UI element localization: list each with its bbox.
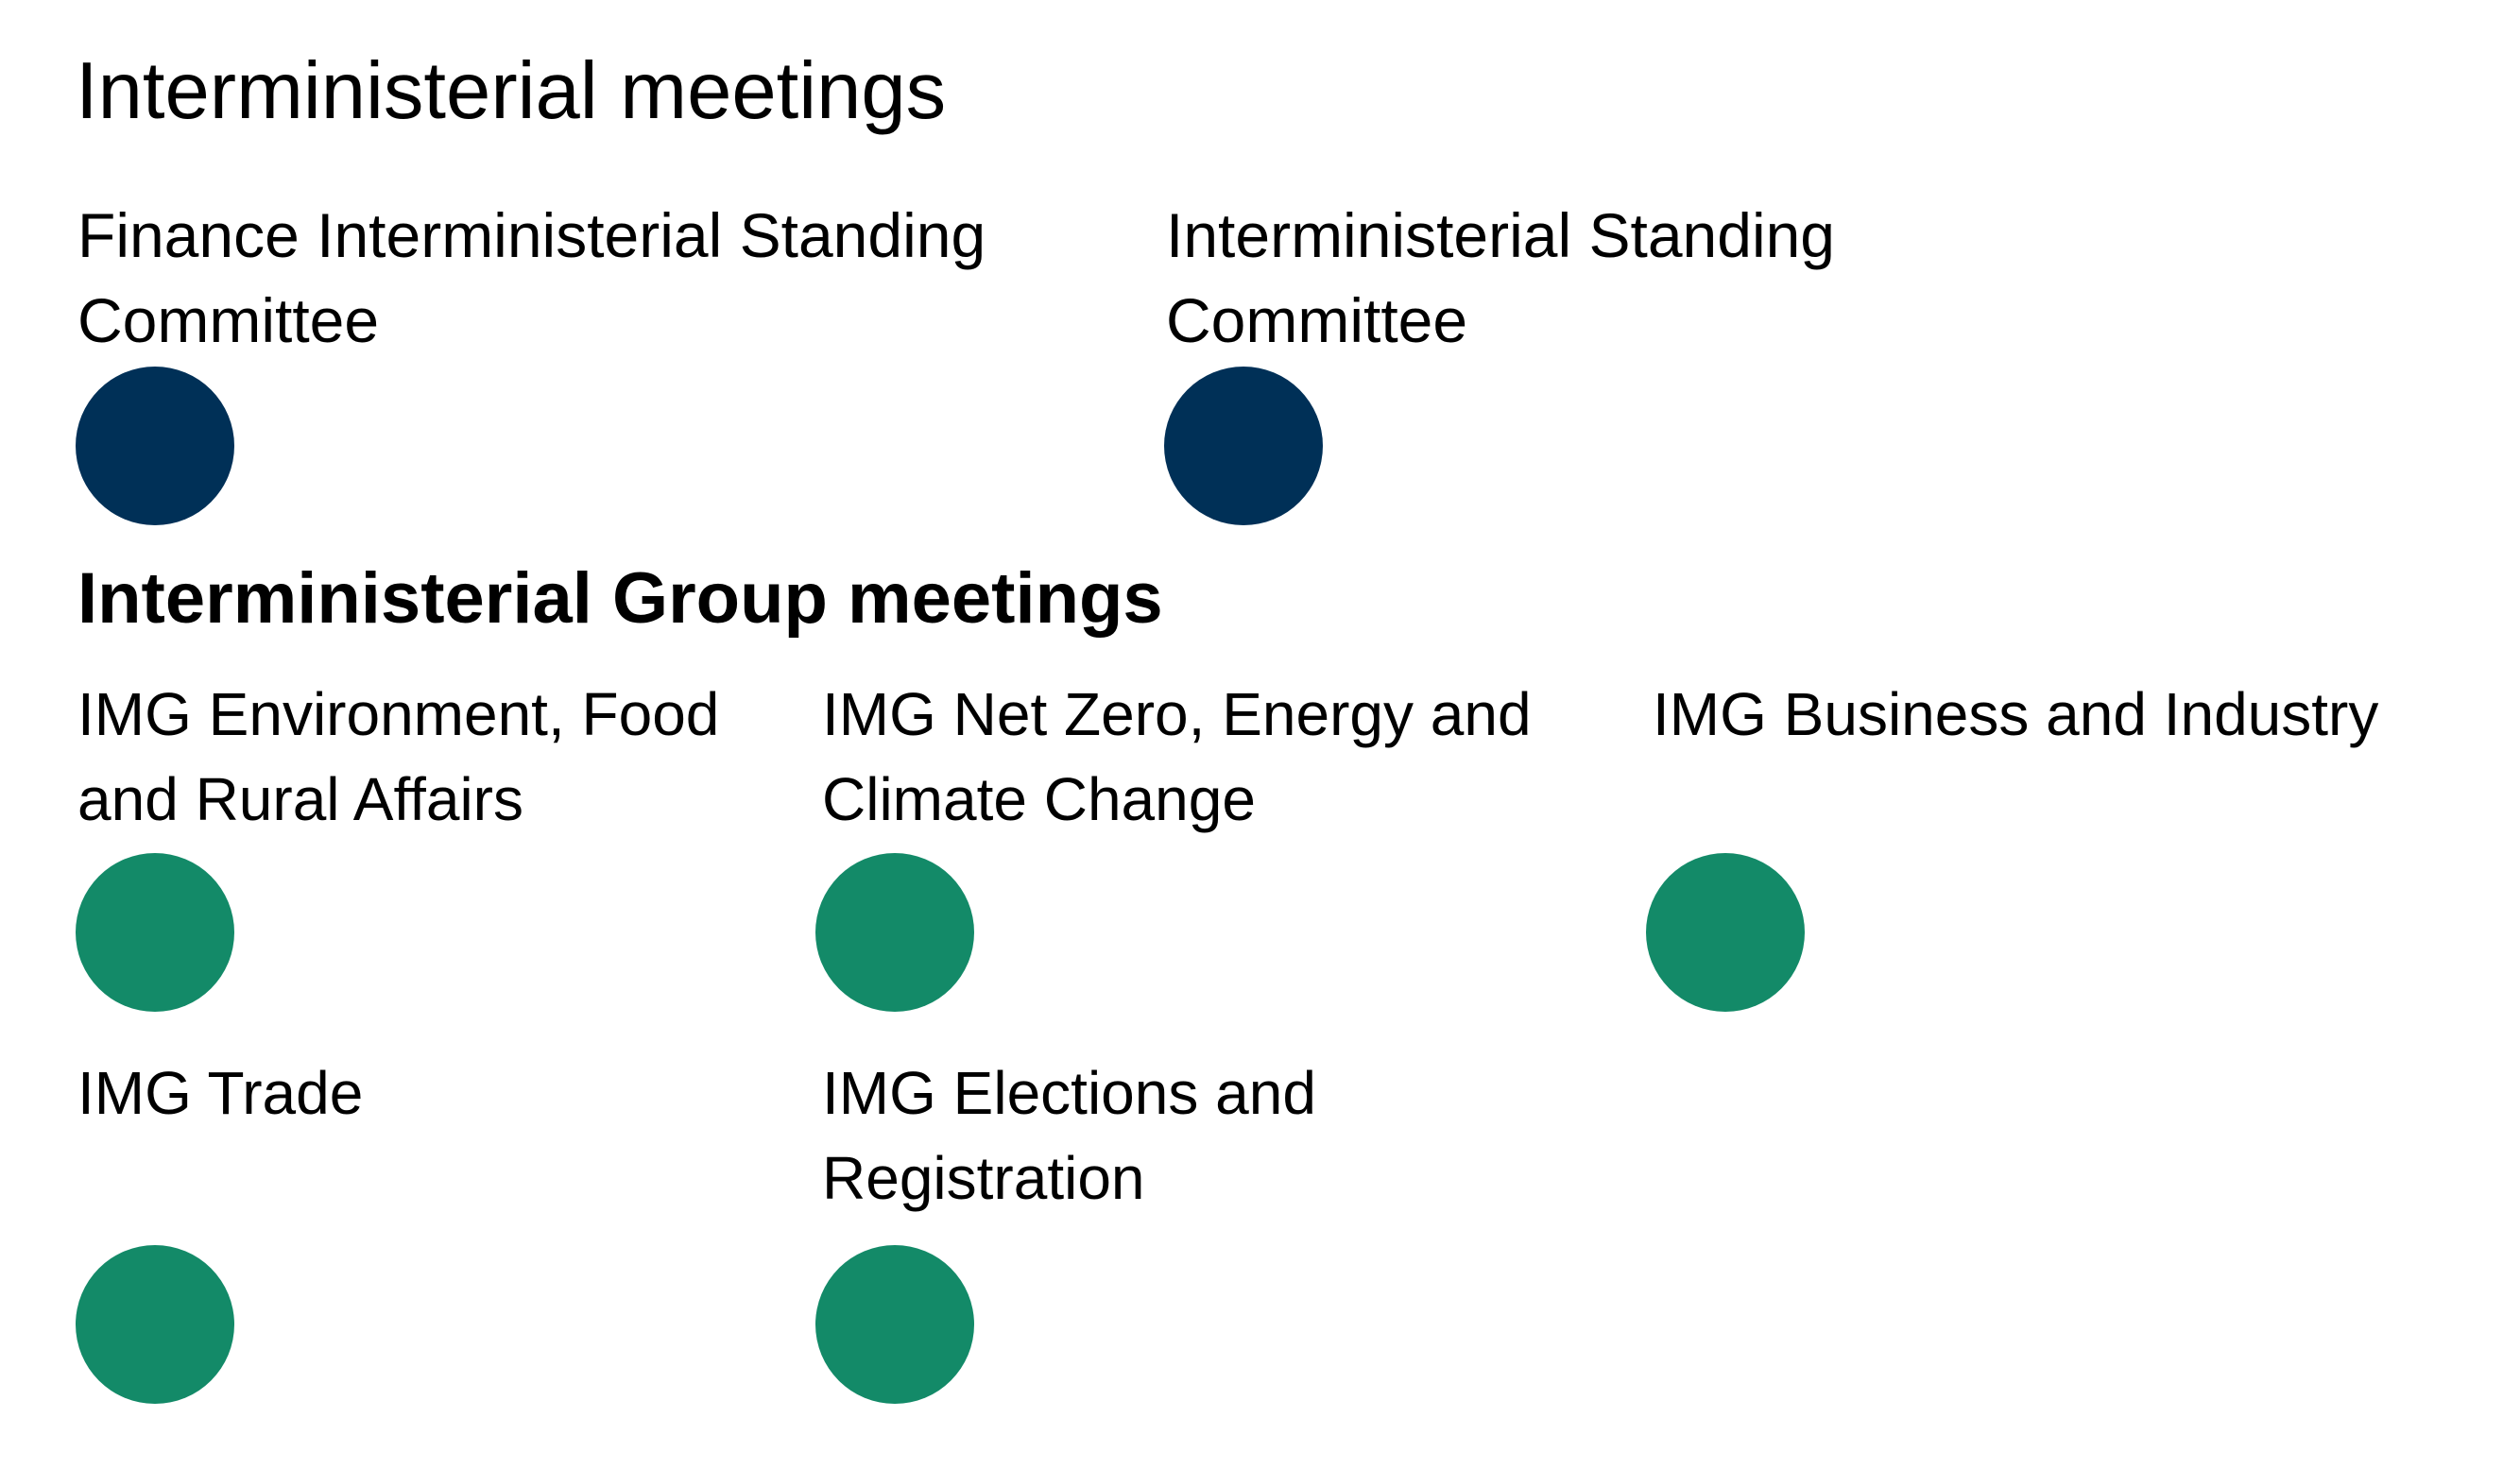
label: IMG Environment, Food <box>77 680 719 748</box>
label: IMG Net Zero, Energy and <box>822 680 1532 748</box>
heading: standing committee: Interministerial Standing <box>1166 200 1835 270</box>
icon: green circle <box>815 1245 974 1404</box>
heading: finance committee <box>77 200 986 355</box>
panel: IMG Trade <box>76 1059 363 1404</box>
heading: finance committee: Committee <box>77 285 379 355</box>
label: IMG Elections and <box>822 1059 1316 1127</box>
icon: green circle <box>815 853 974 1012</box>
panel: IMG Business <box>1646 680 2379 1012</box>
panel: IMG Net Zero <box>815 680 1532 1012</box>
panel: Interministerial Standing Committee <box>1164 200 1835 525</box>
icon: green circle <box>76 1245 234 1404</box>
label: IMG Trade <box>77 1059 363 1127</box>
panel: Finance Interministerial Standing Committee <box>76 200 986 525</box>
label <box>822 1059 1316 1212</box>
heading: standing committee <box>1166 200 1835 355</box>
label: IMG Business and Industry <box>1653 680 2378 748</box>
section heading: Interministerial Group meetings <box>77 558 1163 639</box>
label: Registration <box>822 1144 1145 1212</box>
label <box>77 680 719 833</box>
title: Interministerial meetings <box>76 46 946 136</box>
heading: standing committee: Committee <box>1166 285 1467 355</box>
label: and Rural Affairs <box>77 765 523 833</box>
label <box>822 680 1532 833</box>
panel: IMG Environment <box>76 680 719 1012</box>
icon: navy circle <box>76 367 234 525</box>
panel: IMG Elections <box>815 1059 1316 1404</box>
label: Climate Change <box>822 765 1256 833</box>
icon: green circle <box>76 853 234 1012</box>
heading: finance committee: Finance Interministerial Standing <box>77 200 986 270</box>
icon: green circle <box>1646 853 1805 1012</box>
icon: navy circle <box>1164 367 1323 525</box>
